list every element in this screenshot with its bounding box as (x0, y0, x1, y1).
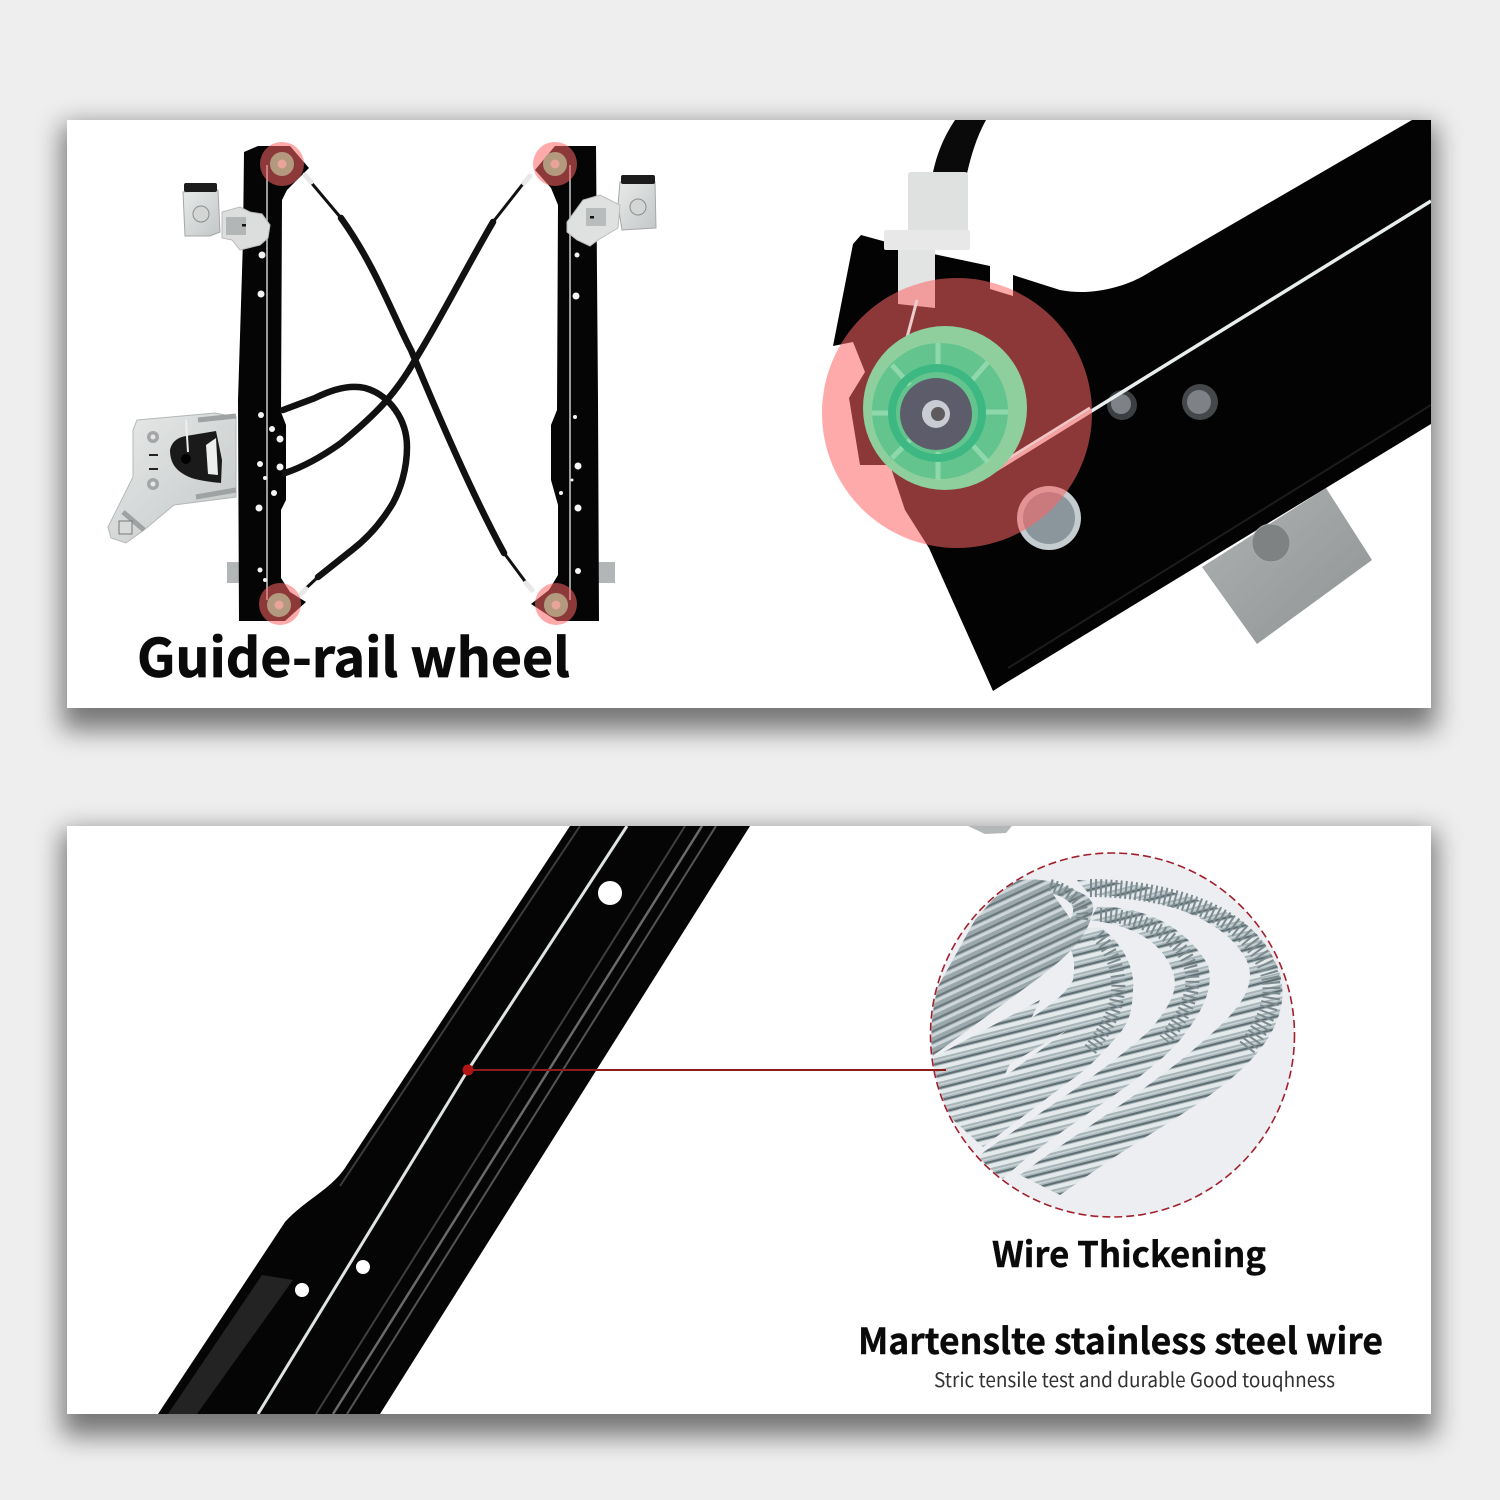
heading: wire thickening: Wire Thickening (992, 1227, 1266, 1278)
rope teeth upper arcs (1050, 885, 1272, 1050)
rope 1 outer (1020, 880, 1282, 1195)
silver fragment (968, 826, 1012, 834)
dashed ring (930, 853, 1294, 1217)
rope 3 (950, 927, 1133, 1147)
cables (283, 180, 530, 592)
left rail (238, 146, 309, 621)
highlight circle (822, 278, 1092, 548)
rope 5 arch (925, 879, 1093, 1058)
green pulley (863, 326, 1027, 490)
bracket left (183, 183, 270, 250)
guide-rail wheel close-up (822, 120, 1431, 691)
window regulator assembly (108, 142, 656, 625)
motor mounting plate (108, 413, 236, 543)
lower left strands (933, 1000, 1040, 1112)
panel: wire thickening (62, 826, 1436, 1436)
rail holes (295, 881, 622, 1297)
rope 4 (938, 934, 1104, 1090)
cable ferrules (300, 175, 532, 595)
panel: guide-rail wheel (62, 120, 1436, 730)
rope 2 (980, 906, 1210, 1179)
bracket right (567, 175, 656, 246)
description text: Stric tensile test and durable Good touqhness (934, 1364, 1335, 1393)
cable (933, 120, 986, 178)
right rail (531, 146, 599, 621)
black rail close-up (158, 826, 1012, 1414)
wire rope photo (925, 853, 1294, 1217)
rail stripes (258, 826, 716, 1414)
wire (996, 201, 1431, 470)
nut on tab (1252, 524, 1290, 562)
heading: guide-rail wheel: Guide-rail wheel (137, 617, 570, 693)
wheel highlights (259, 142, 577, 625)
silver tab (1202, 488, 1372, 644)
rail slot (168, 1275, 293, 1414)
white sleeve (884, 172, 970, 308)
subheading: martensite stainless steel wire: Martenslte stainless steel wire (858, 1313, 1383, 1365)
bottom tabs (227, 562, 615, 583)
upper left coil mass (932, 882, 1070, 1053)
rivets (1017, 384, 1218, 550)
callout line (462, 1064, 946, 1076)
black arm (833, 120, 1431, 691)
